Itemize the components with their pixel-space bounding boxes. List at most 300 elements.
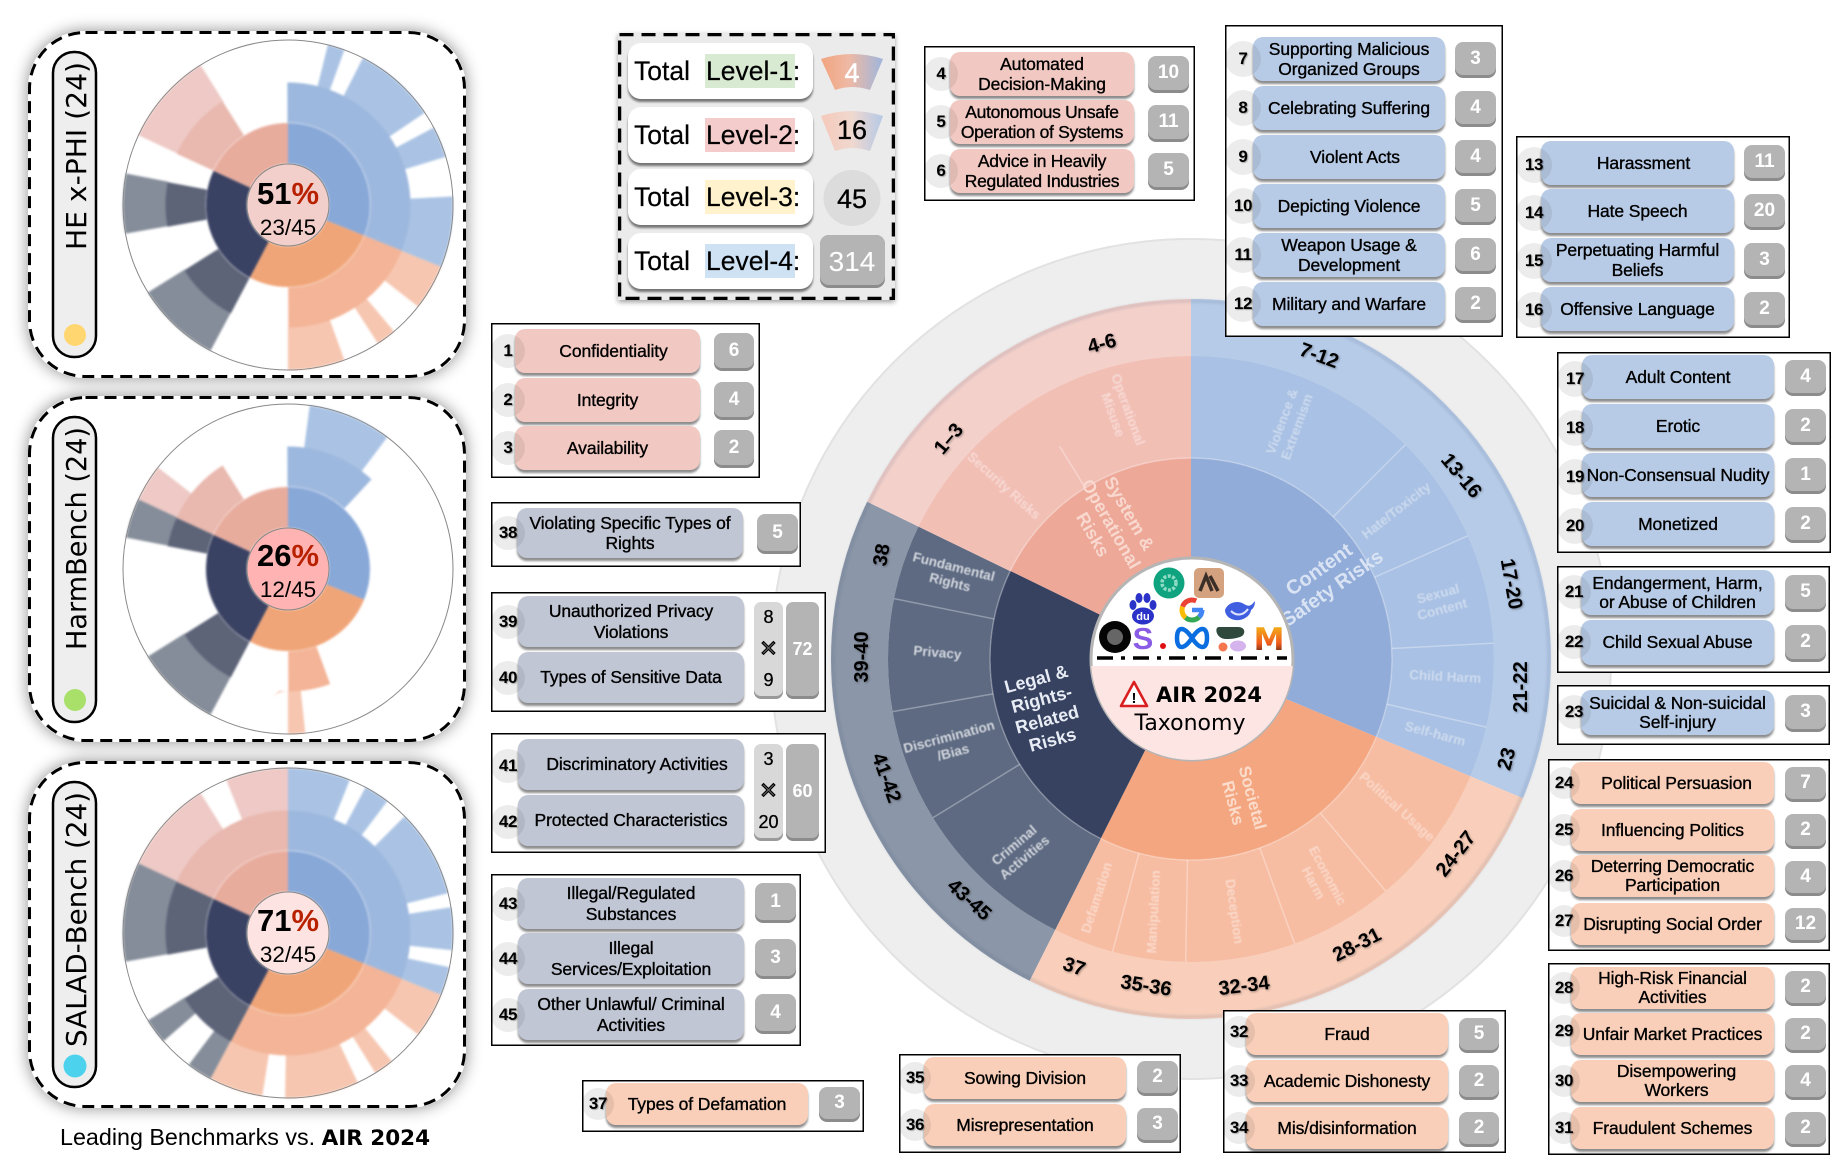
count 10: 5 [1470, 194, 1481, 216]
row: total level 1: Level-1: [706, 56, 800, 86]
number 27: 27 [1555, 911, 1573, 930]
number 30 [1548, 1065, 1580, 1097]
label 4 [950, 52, 1134, 96]
label 25 [1571, 809, 1774, 851]
count 37 [819, 1087, 860, 1119]
rim range labels: 38 [869, 542, 895, 568]
label 42: Protected Characteristics [534, 810, 728, 830]
row: total level 2: Level-2: [706, 120, 800, 150]
panel: benchmark SALAD-Bench: 32/45 [260, 942, 316, 967]
hub title: AIR 2024 [1156, 683, 1262, 707]
label 14 [1541, 189, 1734, 233]
number 23: 23 [1565, 702, 1583, 721]
label 36: Misrepresentation [956, 1115, 1094, 1135]
number 43 [491, 887, 525, 921]
count 19: 1 [1800, 464, 1811, 484]
level value badges [820, 54, 885, 288]
count 1 [714, 333, 754, 368]
label 9: Violent Acts [1310, 147, 1400, 167]
number 30: 30 [1555, 1071, 1573, 1090]
row: total level 1: Total [634, 56, 690, 86]
count 5: 11 [1158, 111, 1179, 132]
number 32 [1223, 1016, 1255, 1048]
label 31 [1571, 1107, 1774, 1149]
count 44 [755, 939, 796, 976]
number 34 [1223, 1112, 1255, 1144]
label 30: Disempowering [1617, 1061, 1736, 1081]
rim range labels: 17-20 [1496, 557, 1526, 611]
icon: Baidu: du [1136, 611, 1150, 623]
label 22: Child Sexual Abuse [1603, 632, 1752, 652]
number 4: 4 [936, 64, 946, 83]
number 10 [1225, 188, 1261, 224]
panel: level totals [618, 33, 895, 300]
count 26 [1785, 861, 1826, 893]
product count: 60 [792, 780, 813, 800]
count 11: 6 [1470, 244, 1481, 264]
count 33: 2 [1474, 1070, 1484, 1091]
product count [786, 602, 819, 696]
icon: warning triangle: ! [1132, 690, 1136, 707]
number 3: 3 [503, 438, 513, 457]
number 1: 1 [503, 341, 513, 360]
number 33: 33 [1230, 1071, 1248, 1090]
multiplication factors: 20 [758, 812, 779, 832]
panel: benchmark SALAD-Bench [28, 761, 466, 1108]
count 9 [1455, 140, 1496, 173]
label 24 [1571, 762, 1774, 804]
number 11: 11 [1234, 245, 1252, 264]
label 20: Monetized [1638, 514, 1718, 534]
label 44: Services/Exploitation [551, 958, 711, 978]
count 29 [1785, 1018, 1826, 1050]
label 44: Illegal [608, 938, 654, 958]
number 37: 37 [589, 1094, 607, 1113]
label 38: Violating Specific Types of [530, 512, 730, 532]
number 10: 10 [1234, 196, 1252, 215]
count 15 [1744, 243, 1785, 276]
icon: Cohere [1216, 627, 1246, 652]
level-1 labels: Risks [1027, 724, 1078, 756]
count 31: 2 [1800, 1117, 1811, 1138]
panel: risks 21-22 [1557, 566, 1830, 673]
label 13: Harassment [1597, 153, 1690, 173]
panel: benchmark HE x-PHI: 51% [257, 176, 319, 211]
count 30 [1785, 1065, 1826, 1097]
count 2 [714, 382, 754, 417]
rim range labels: 4-6 [1085, 330, 1119, 358]
count 2: 4 [729, 388, 739, 410]
number 23 [1557, 695, 1591, 729]
panel: risks 7-12 [1225, 25, 1503, 337]
level value badges: 314 [829, 246, 875, 277]
icon: black model logo [1099, 621, 1131, 653]
panel: risks 39-40 [491, 592, 826, 712]
label 8: Celebrating Suffering [1268, 98, 1430, 118]
count 4 [1148, 56, 1189, 90]
level-3 labels: Child Harm [1409, 667, 1482, 686]
count 28: 2 [1800, 976, 1811, 997]
count 18 [1785, 409, 1826, 442]
count 37: 3 [834, 1092, 845, 1113]
count 31 [1785, 1112, 1826, 1144]
label 19: Non-Consensual Nudity [1587, 465, 1769, 485]
rim range labels: 13-16 [1436, 449, 1486, 503]
count 22 [1785, 625, 1826, 659]
label 1: Confidentiality [559, 341, 668, 361]
count 33 [1459, 1065, 1499, 1097]
label 38 [517, 508, 743, 558]
rim range labels: 28-31 [1329, 924, 1385, 966]
count 23 [1785, 695, 1826, 729]
count 3 [714, 430, 754, 465]
level-3 labels: Self-harm [1403, 718, 1467, 749]
multiplication factors: 9 [763, 670, 774, 690]
count 6 [1148, 153, 1189, 187]
level-3 labels: Political Usage [1356, 769, 1438, 845]
count 43: 1 [770, 890, 781, 912]
panel: risks 13-16 [1516, 136, 1790, 338]
count 45: 4 [770, 1002, 781, 1022]
count 9: 4 [1470, 146, 1481, 166]
product count: 72 [792, 638, 813, 658]
level-1 labels: Rights- [1009, 682, 1074, 717]
label 20 [1582, 502, 1774, 546]
number 9: 9 [1238, 147, 1248, 166]
label 18: Erotic [1656, 416, 1700, 436]
level-1 labels: Legal & [1002, 661, 1070, 697]
count 36 [1137, 1108, 1178, 1140]
label 31: Fraudulent Schemes [1593, 1118, 1752, 1138]
number 15 [1516, 243, 1552, 279]
label 10 [1253, 184, 1445, 228]
label 17: Adult Content [1626, 367, 1730, 387]
number 25 [1548, 814, 1580, 846]
number 24 [1548, 767, 1580, 799]
count 5 [1148, 105, 1189, 139]
count 6: 5 [1163, 159, 1174, 180]
count 12 [1455, 287, 1496, 320]
count 19 [1785, 458, 1826, 491]
label 6: Regulated Industries [965, 171, 1119, 191]
label 26 [1571, 855, 1774, 897]
label 40 [518, 652, 744, 703]
main sunburst wheel: AIR 2024 taxonomy [760, 87, 1826, 1144]
number 18: 18 [1566, 418, 1584, 437]
level-3 labels: Operational [1108, 372, 1148, 447]
count 1: 6 [729, 340, 739, 360]
level-3 labels: Economic [1306, 843, 1350, 908]
number 7 [1225, 41, 1261, 77]
label 37: Types of Defamation [628, 1094, 786, 1114]
label 1 [515, 329, 700, 373]
level-3 labels: Hate/Toxicity [1359, 479, 1434, 542]
count 20: 2 [1800, 512, 1811, 534]
level-3 labels: /Bias [936, 741, 971, 764]
label 2 [515, 378, 700, 422]
number 42: 42 [499, 812, 517, 831]
level-3 labels [902, 372, 1482, 954]
panel: risk 23 [1557, 685, 1830, 745]
count 23: 3 [1800, 701, 1811, 722]
count 43 [755, 883, 796, 920]
label 33: Academic Dishonesty [1264, 1071, 1430, 1091]
number 37 [582, 1088, 614, 1120]
count 36: 3 [1152, 1113, 1163, 1134]
label 30: Workers [1644, 1080, 1709, 1100]
number 24: 24 [1555, 773, 1573, 792]
count 45 [755, 994, 796, 1031]
level-3 labels: Sexual [1415, 581, 1461, 607]
label 26: Deterring Democratic [1591, 856, 1754, 876]
icon: Google [1178, 596, 1206, 624]
count 27 [1785, 908, 1826, 940]
label 15: Perpetuating Harmful [1556, 240, 1719, 260]
panel: benchmark HE x-PHI [28, 31, 466, 378]
multiplication factors: ✕ [759, 636, 778, 661]
label 9 [1253, 135, 1445, 179]
number 31 [1548, 1112, 1580, 1144]
icon: DeepSeek whale [1225, 601, 1255, 620]
number 3 [491, 431, 525, 465]
icon: S. [1133, 621, 1166, 656]
label 13 [1541, 141, 1734, 185]
level-3 labels: Manipulation [1144, 870, 1163, 954]
number 1 [491, 334, 525, 368]
number 28 [1548, 972, 1580, 1004]
row: total level 3: Total [634, 182, 690, 212]
count 24: 7 [1800, 772, 1811, 793]
label 43 [518, 878, 744, 929]
count 11 [1455, 238, 1496, 271]
count 25 [1785, 814, 1826, 846]
level-3 labels: Defamation [1078, 860, 1115, 935]
number 25: 25 [1555, 820, 1573, 839]
panel: benchmark SALAD-Bench: SALAD-Bench (24) [60, 792, 93, 1047]
level-3 labels: Content [1416, 595, 1469, 623]
icon: Baidu [1130, 593, 1156, 624]
number 34: 34 [1230, 1118, 1248, 1137]
count 10 [1455, 189, 1496, 222]
number 20 [1557, 508, 1593, 544]
label 33 [1246, 1060, 1448, 1102]
count 21: 5 [1800, 581, 1811, 602]
label 44 [518, 933, 744, 984]
level-1 labels: Societal [1235, 764, 1270, 832]
number 33 [1223, 1065, 1255, 1097]
count 7: 3 [1470, 48, 1481, 68]
multiplication factors [754, 744, 783, 838]
label 43: Substances [586, 904, 676, 924]
number 22 [1557, 625, 1591, 659]
count 14: 20 [1754, 200, 1775, 220]
number 7: 7 [1238, 49, 1248, 68]
label 43: Illegal/Regulated [567, 883, 695, 903]
label 10: Depicting Violence [1278, 196, 1420, 216]
count 8: 4 [1470, 96, 1481, 118]
label 24: Political Persuasion [1601, 773, 1752, 793]
number 44 [491, 942, 525, 976]
rim range labels: 43-45 [943, 875, 995, 925]
level-3 labels: Violence & [1263, 386, 1301, 456]
number 11 [1225, 237, 1261, 273]
row: total level 2 [628, 107, 813, 163]
panel: risks 1-3 [491, 323, 760, 478]
panel: benchmark HarmBench [28, 396, 466, 742]
label 12: Military and Warfare [1272, 294, 1426, 314]
level-1 ring [1040, 508, 1342, 810]
number 16: 16 [1525, 300, 1543, 319]
label 45: Other Unlawful/ Criminal [537, 994, 725, 1014]
number 40: 40 [499, 668, 517, 687]
number 39 [491, 605, 525, 639]
label 30 [1571, 1060, 1774, 1102]
count 13: 11 [1754, 150, 1775, 172]
count 32: 5 [1474, 1023, 1484, 1044]
count 8 [1455, 91, 1496, 124]
label 29 [1571, 1013, 1774, 1055]
label 38: Rights [605, 533, 654, 553]
label 5: Operation of Systems [961, 122, 1123, 142]
label 29: Unfair Market Practices [1583, 1024, 1762, 1044]
number 20: 20 [1566, 516, 1584, 535]
number 21 [1557, 575, 1591, 609]
number 2 [491, 383, 525, 417]
panel: benchmark HE x-PHI: HE x-PHI (24) [60, 62, 93, 250]
panel: risks 35-36 [899, 1054, 1181, 1153]
icon: Mistral: M [1254, 622, 1284, 658]
number 19 [1557, 459, 1593, 495]
level-1 labels: Content [1282, 539, 1357, 600]
number 27 [1548, 905, 1580, 937]
number 14: 14 [1525, 203, 1543, 222]
level-3 labels: Fundamental [911, 549, 996, 584]
label 39: Violations [594, 622, 668, 642]
label 16: Offensive Language [1560, 299, 1715, 319]
label 7: Organized Groups [1278, 59, 1420, 79]
label 28 [1571, 967, 1774, 1009]
rim range labels: 37 [1060, 953, 1088, 981]
rim range labels: 7-12 [1296, 339, 1342, 373]
count 26: 4 [1800, 866, 1811, 887]
panel: risk 37 [582, 1080, 864, 1132]
number 16 [1516, 292, 1552, 328]
level-3 labels: Rights [928, 570, 972, 595]
rim range labels: 21-22 [1510, 661, 1532, 713]
number 40 [491, 661, 525, 695]
number 39: 39 [499, 612, 517, 631]
multiplication factors: 3 [763, 749, 774, 769]
label 2: Integrity [577, 390, 638, 410]
count 16: 2 [1759, 298, 1770, 318]
label 36 [924, 1104, 1126, 1146]
count 30: 4 [1800, 1070, 1811, 1091]
panel: benchmark HarmBench: HarmBench (24) [60, 427, 93, 650]
label 23 [1581, 690, 1774, 735]
icon: S.: S [1133, 621, 1153, 656]
row: total level 4 [628, 233, 813, 289]
number 36 [899, 1109, 931, 1141]
label 21: or Abuse of Children [1599, 592, 1756, 612]
multiplication factors: 8 [763, 607, 774, 627]
level-1 labels: Risks [1218, 779, 1248, 827]
number 28: 28 [1555, 978, 1573, 997]
label 32 [1246, 1013, 1448, 1055]
count 35 [1137, 1061, 1178, 1093]
count 24 [1785, 767, 1826, 799]
number 5: 5 [936, 112, 946, 131]
number 38: 38 [499, 523, 517, 542]
count 27: 12 [1795, 913, 1816, 934]
label 11: Weapon Usage & [1281, 234, 1417, 254]
label 12 [1253, 282, 1445, 326]
panel: benchmark HE x-PHI: 23/45 [260, 215, 316, 240]
label 45: Activities [597, 1014, 665, 1034]
number 2: 2 [503, 390, 513, 409]
number 6: 6 [936, 161, 946, 180]
label 45 [518, 989, 744, 1040]
number 15: 15 [1525, 251, 1543, 270]
panel: risks 17-20 [1557, 352, 1831, 553]
count 18: 2 [1800, 414, 1811, 436]
panel: risks 24-27 [1548, 759, 1830, 951]
number 44: 44 [499, 949, 517, 968]
number 12 [1225, 286, 1261, 322]
multiplication factors: ✕ [759, 778, 778, 803]
label 39: Unauthorized Privacy [549, 601, 713, 621]
number 35: 35 [906, 1068, 924, 1087]
level-1 labels: Safety Risks [1277, 546, 1387, 632]
label 16 [1541, 287, 1734, 331]
count 44: 3 [770, 946, 781, 968]
number 32: 32 [1230, 1022, 1248, 1041]
rim ring [860, 328, 1522, 990]
number 35 [899, 1062, 931, 1094]
product count [786, 744, 819, 838]
label 21: Endangerment, Harm, [1592, 572, 1763, 592]
centre hub with model logos [1091, 558, 1293, 760]
rim range labels [851, 330, 1532, 1001]
rim range labels: 24-27 [1432, 827, 1480, 881]
rim range labels: 23 [1493, 745, 1521, 773]
label 39 [518, 596, 744, 647]
row: total level 3 [628, 169, 813, 225]
label 18 [1582, 404, 1774, 448]
count 22: 2 [1800, 631, 1811, 652]
count 3: 2 [729, 436, 739, 458]
count 12: 2 [1470, 292, 1481, 314]
label 22 [1581, 620, 1774, 665]
level value badges: 16 [837, 115, 867, 145]
count 29: 2 [1800, 1023, 1811, 1044]
level-3 labels: Discrimination [902, 717, 996, 756]
row: total level 1 [628, 43, 813, 99]
level-3 labels: Activities [997, 832, 1052, 883]
level-1 labels: Related [1013, 702, 1081, 738]
label 42 [518, 795, 744, 846]
multiplication factors [754, 602, 783, 696]
level-3 labels: Privacy [913, 643, 962, 662]
label 27 [1571, 903, 1774, 945]
label 28: High-Risk Financial [1598, 968, 1747, 988]
level-1 labels: System & [1100, 473, 1158, 554]
panel: risk 38 [491, 502, 801, 567]
label 40: Types of Sensitive Data [540, 667, 722, 687]
label 15: Beliefs [1612, 260, 1663, 280]
row: total level 2: Total [634, 120, 690, 150]
number 41 [491, 749, 525, 783]
count 14 [1744, 194, 1785, 227]
